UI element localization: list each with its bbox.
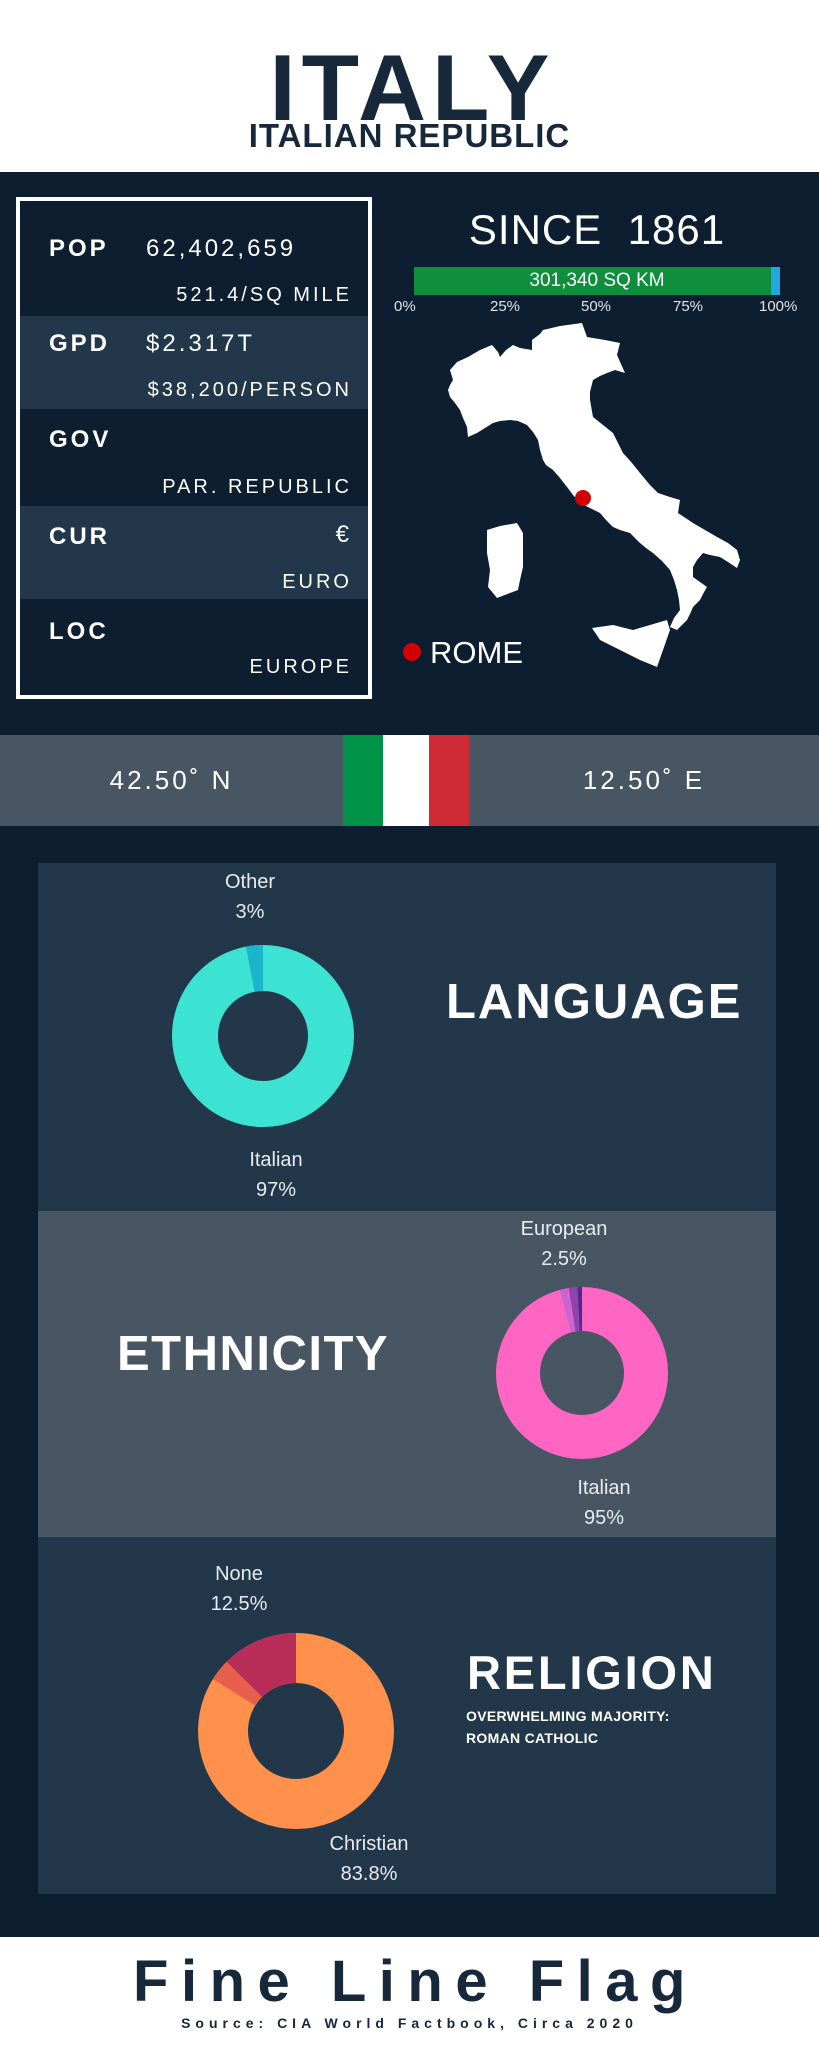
- coordinates band: 42.50˚ N: [110, 765, 233, 795]
- area bar: 301,340 SQ KM: [529, 270, 665, 291]
- source: Source: CIA World Factbook, Circa 2020: [181, 2015, 638, 2031]
- coordinates band: 12.50˚ E: [583, 765, 705, 795]
- bar axis: 0%: [394, 298, 416, 315]
- panel: facts box: PAR. REPUBLIC: [162, 476, 352, 498]
- language donut: [172, 945, 354, 1127]
- panel: ethnicity: European: [521, 1218, 607, 1240]
- panel: ethnicity: Italian: [577, 1477, 631, 1499]
- religion note: ROMAN CATHOLIC: [466, 1730, 598, 1746]
- heading: since 1861: SINCE 1861: [469, 206, 725, 253]
- panel: language: 97%: [256, 1179, 296, 1201]
- bar axis: 75%: [673, 298, 703, 315]
- map of Italy: [448, 323, 740, 667]
- religion note: OVERWHELMING MAJORITY:: [466, 1708, 670, 1724]
- panel: religion: 12.5%: [211, 1593, 267, 1615]
- panel: facts box: $38,200/PERSON: [148, 379, 352, 401]
- title: ITALY: [270, 35, 555, 140]
- POP row: POP: [49, 235, 109, 262]
- panel: religion: 83.8%: [341, 1863, 397, 1885]
- icon: rome dot: [575, 490, 591, 506]
- subtitle: ITALIAN REPUBLIC: [249, 117, 570, 154]
- LOC row: LOC: [49, 618, 109, 645]
- panel: facts box: [16, 197, 372, 699]
- religion note: [466, 1708, 670, 1746]
- panel: religion: None: [215, 1563, 263, 1585]
- panel: facts box: 62,402,659: [146, 235, 296, 262]
- panel: facts box: EURO: [282, 571, 352, 593]
- ethnicity donut: [496, 1287, 668, 1459]
- panel: facts box: €: [336, 521, 352, 548]
- heading: ethnicity: ETHNICITY: [117, 1327, 389, 1381]
- panel: facts box: EUROPE: [250, 656, 352, 678]
- area bar: [414, 267, 780, 295]
- religion donut: [198, 1633, 394, 1829]
- coordinates band: [0, 735, 819, 826]
- panel: ethnicity: 95%: [584, 1507, 624, 1529]
- GDP row: GPD: [49, 330, 110, 357]
- panel: facts box: 521.4/SQ MILE: [176, 284, 352, 306]
- GOV row: GOV: [49, 426, 111, 453]
- heading: religion: RELIGION: [467, 1646, 717, 1699]
- legend: rome: ROME: [430, 635, 523, 670]
- panel: language: 3%: [236, 901, 264, 923]
- heading: language: LANGUAGE: [446, 975, 742, 1029]
- bar axis: 25%: [490, 298, 520, 315]
- panel: ethnicity: 2.5%: [541, 1248, 587, 1270]
- footer brand: Fine Line Flag: [133, 1949, 698, 2014]
- bar axis: [394, 298, 797, 315]
- panel: ethnicity: [38, 1211, 776, 1537]
- panel: language: Other: [225, 871, 275, 893]
- flag: [343, 735, 469, 826]
- panel: religion: [38, 1537, 776, 1894]
- panel: facts box: $2.317T: [146, 330, 255, 357]
- panel: religion: Christian: [330, 1833, 408, 1855]
- bar axis: 100%: [759, 298, 797, 315]
- bar axis: 50%: [581, 298, 611, 315]
- panel: language: Italian: [249, 1149, 303, 1171]
- panel: language: [38, 863, 776, 1211]
- CUR row: CUR: [49, 523, 110, 550]
